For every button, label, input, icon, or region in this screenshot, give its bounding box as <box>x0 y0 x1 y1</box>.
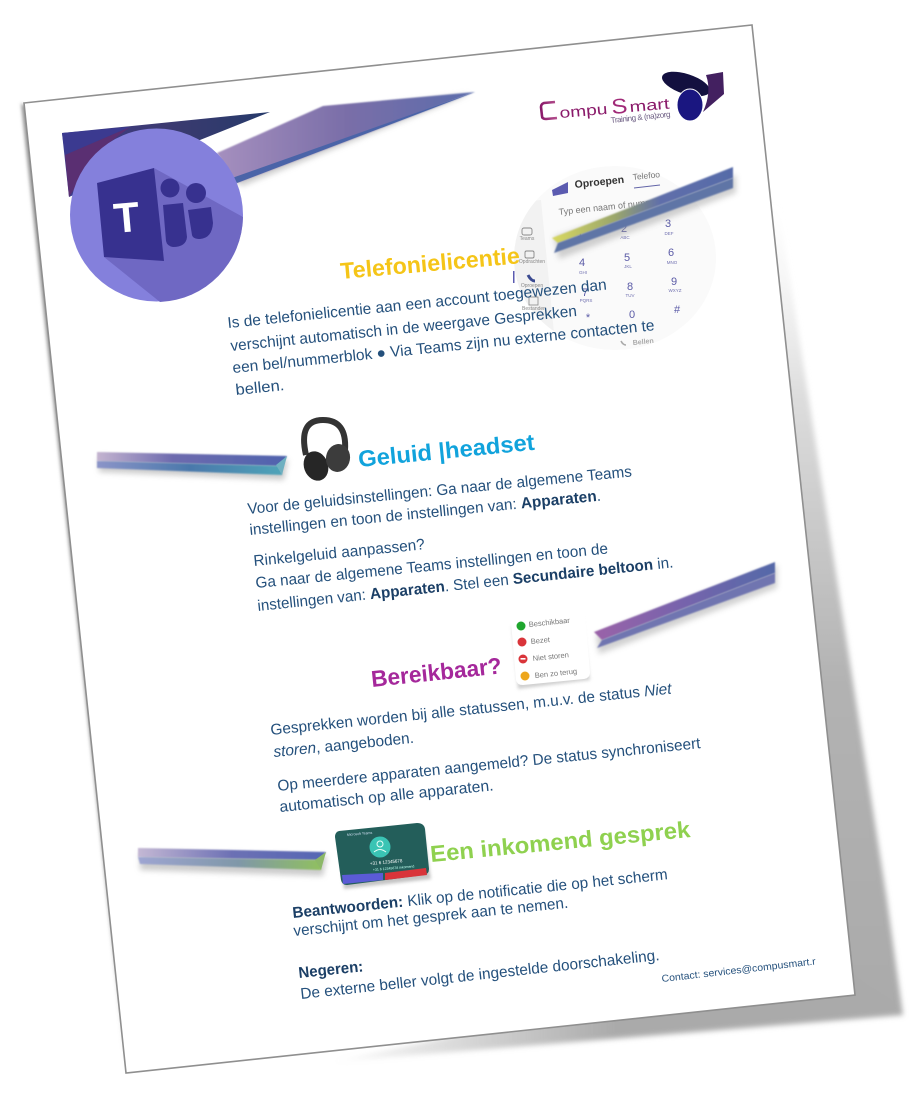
dial pad screenshot: # <box>674 304 681 316</box>
dial pad screenshot: GHI <box>579 270 587 275</box>
dial pad screenshot: TUV <box>626 293 634 298</box>
dial pad screenshot: WXYZ <box>668 288 682 293</box>
incoming call card: Microsoft Teams <box>347 831 373 837</box>
dial pad screenshot: 5 <box>624 252 630 264</box>
dial pad screenshot <box>513 172 682 346</box>
status card: Ben zo terug <box>534 667 578 680</box>
status card: Beschikbaar <box>528 616 571 629</box>
text block: geluid <box>247 463 674 615</box>
heading: Een inkomend gesprek: Een inkomend gesprek <box>429 816 691 867</box>
incoming call card: +31 6 12345678 <box>370 858 403 866</box>
dial pad screenshot: 3 <box>665 218 671 230</box>
heading: Bereikbaar: Bereikbaar? <box>370 652 503 692</box>
icon: headset <box>300 420 352 484</box>
text block: telefonielicentie <box>227 277 655 399</box>
text block: inkomend gesprek: Beantwoorden: Klik op de notificatie die op het scherm <box>292 866 668 922</box>
decorative bar over dial pad <box>552 167 736 259</box>
text block: telefonielicentie: bellen. <box>235 377 285 399</box>
top banner shapes <box>62 92 475 197</box>
dial pad screenshot: Telefoo <box>632 169 661 182</box>
text block: geluid: instellingen en toon de instellingen van: Apparaten. <box>249 488 602 539</box>
dial pad screenshot: Teams <box>520 236 535 242</box>
dial pad screenshot: 8 <box>627 281 633 293</box>
icon: Microsoft Teams logo <box>70 128 243 302</box>
dial pad screenshot: 0 <box>629 309 635 321</box>
text block: inkomend gesprek: Negeren: <box>298 958 364 982</box>
dial pad screenshot: Oproepen <box>521 283 543 289</box>
icon: Microsoft Teams logo: T <box>112 193 142 242</box>
heading: Telefonielicentie: Telefonielicentie <box>339 242 521 284</box>
decorative bar: headset <box>97 452 288 480</box>
dial pad screenshot: ABC <box>620 235 630 240</box>
dial pad screenshot: 6 <box>668 247 674 259</box>
dial pad screenshot: Oproepen <box>574 174 625 191</box>
text block: bereikbaar: Gesprekken worden bij alle statussen, m.u.v. de status Niet <box>270 681 673 739</box>
logo: CompuSmart: S <box>610 95 628 119</box>
logo: CompuSmart <box>541 67 724 125</box>
text block: telefonielicentie: verschijnt automatisch in de weergave Gesprekken <box>230 303 578 355</box>
logo: CompuSmart: Training & (na)zorg <box>610 110 671 125</box>
dial pad screenshot: Typ een naam of nummer <box>558 196 661 217</box>
text block: telefonielicentie: een bel/nummerblok ● Via Teams zijn nu externe contacten te <box>232 317 655 377</box>
dial pad screenshot: 1 <box>577 228 583 240</box>
text block: bereikbaar: Op meerdere apparaten aangemeld? De status synchroniseert <box>277 735 702 795</box>
dial pad screenshot: Bellen <box>632 338 654 347</box>
dial pad screenshot: PQRS <box>580 298 592 303</box>
dial pad screenshot: 4 <box>579 257 585 269</box>
text block: bereikbaar <box>270 681 702 816</box>
status card <box>511 609 590 689</box>
dial pad screenshot: 2 <box>621 223 627 235</box>
text block: geluid: Rinkelgeluid aanpassen? <box>253 536 426 570</box>
dial pad screenshot: Bestanden <box>522 306 546 312</box>
dial pad screenshot: DEF <box>664 231 674 236</box>
text block: geluid: Ga naar de algemene Teams instellingen en toon de <box>255 541 609 592</box>
logo: CompuSmart: ompu <box>559 101 608 122</box>
dial pad screenshot: Opdrachten <box>519 259 545 265</box>
text block: bereikbaar: automatisch op alle apparaten. <box>279 777 494 816</box>
decorative bar: bereikbaar <box>594 562 777 654</box>
dial pad screenshot: JKL <box>624 264 632 269</box>
dial pad screenshot: 9 <box>671 276 677 288</box>
dial pad screenshot: 7 <box>582 287 588 299</box>
logo: CompuSmart: mart <box>629 95 671 116</box>
dial pad screenshot: MNO <box>667 260 678 265</box>
incoming call card: +31 6 12345678 inkomend <box>373 864 415 872</box>
incoming call card <box>335 823 431 889</box>
text block: inkomend gesprek: De externe beller volgt de ingestelde doorschakeling. <box>300 947 660 1003</box>
contact line: Contact: services@compusmart.r <box>661 956 817 985</box>
text block: inkomend gesprek: verschijnt om het gesprek aan te nemen. <box>293 895 569 940</box>
text block: bereikbaar: storen, aangeboden. <box>273 730 415 761</box>
text block: inkomend gesprek <box>292 866 668 1003</box>
text block: geluid: Voor de geluidsinstellingen: Ga naar de algemene Teams <box>247 463 633 518</box>
status card: Bezet <box>530 635 551 646</box>
text block: telefonielicentie: Is de telefonielicentie aan een account toegewezen dan <box>227 277 607 332</box>
text block: geluid: instellingen van: Apparaten. Stel een Secundaire beltoon in. <box>257 554 674 615</box>
decorative bar: inkomend gesprek <box>138 848 327 876</box>
heading: Geluid headset: Geluid |headset <box>357 429 536 472</box>
dial pad screenshot: * <box>586 312 591 324</box>
status card: Niet storen <box>532 650 569 663</box>
